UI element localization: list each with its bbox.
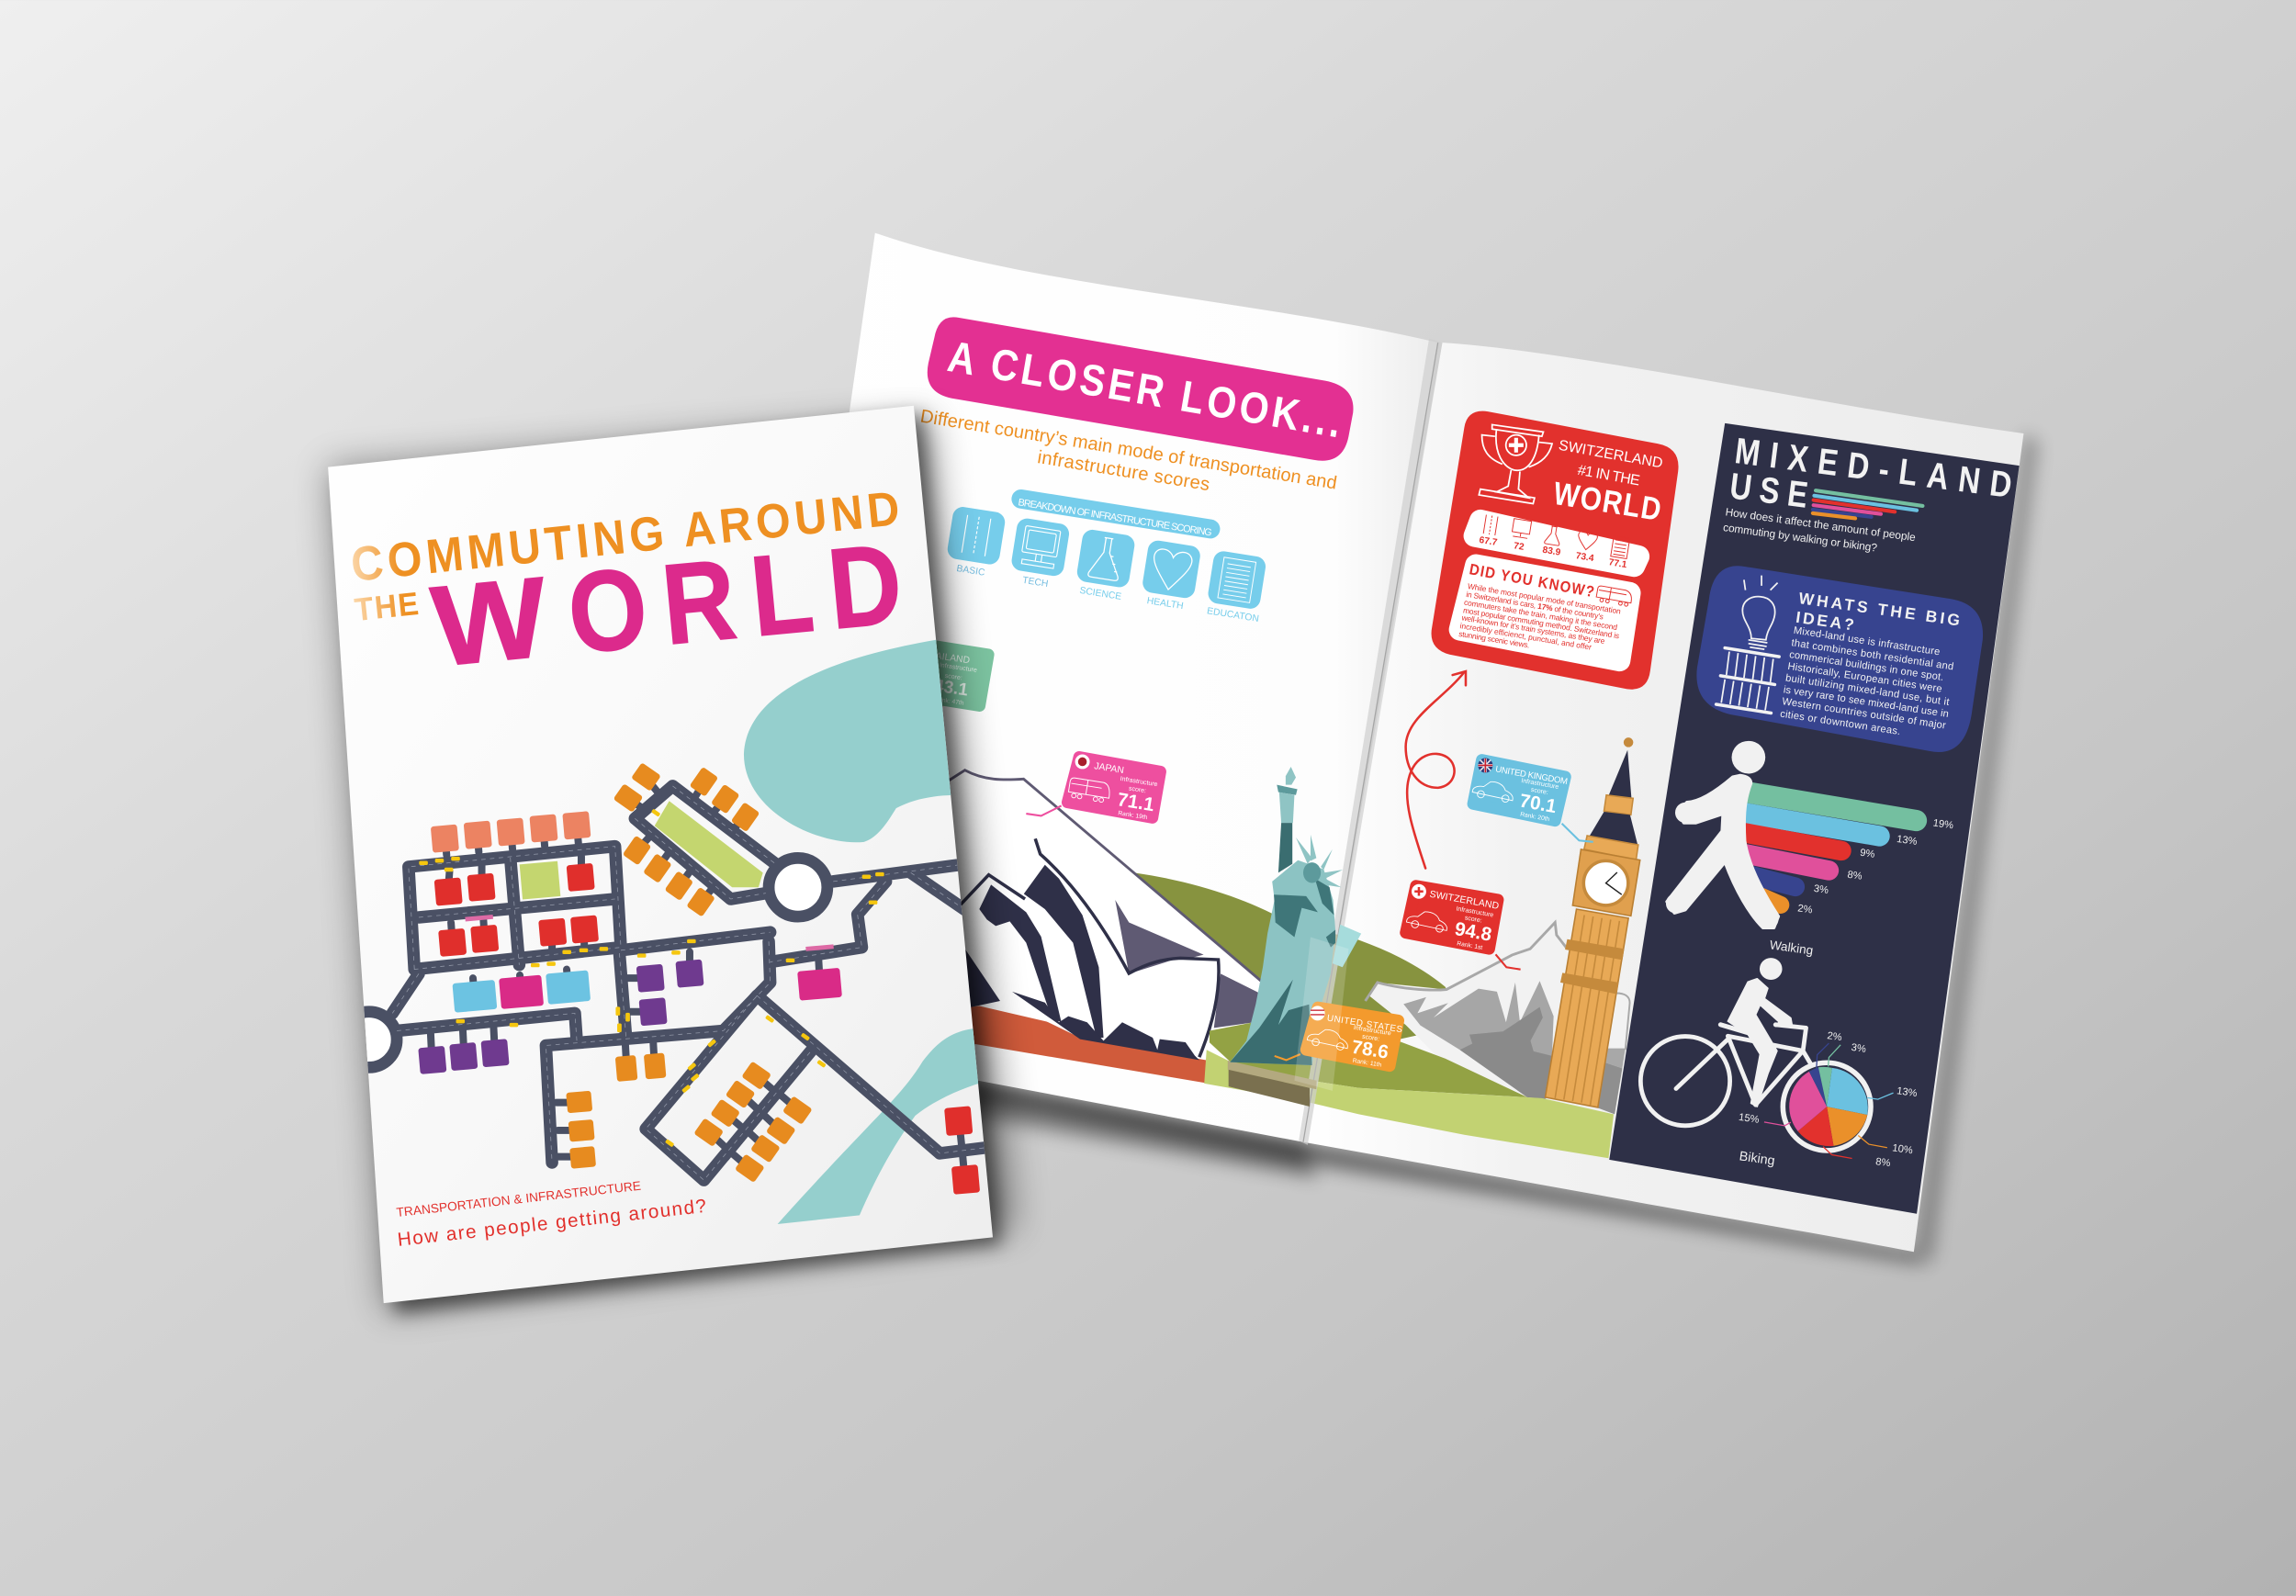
card heading: WORLD — [1551, 476, 1663, 527]
did you know panel: DID YOU KNOW? — [1468, 562, 1595, 601]
chart: biking wheel pie and rider: 15% — [1738, 1112, 1760, 1126]
label: science: SCIENCE — [1079, 586, 1122, 602]
panel: what's the big idea: built utilizing mixed-land use, but it — [1784, 673, 1951, 708]
panel: what's the big idea: commerical buildings in one spot. — [1788, 649, 1944, 683]
panel: left page of magazine — [761, 233, 1438, 1142]
map: road cars — [419, 809, 884, 1147]
tag: Thailand — [915, 645, 988, 707]
card heading: #1 IN THE — [1576, 463, 1641, 489]
landmark: statue of liberty — [1228, 767, 1361, 1107]
tag: United States — [1275, 1006, 1403, 1069]
chart: walking bars and figure — [1666, 741, 1954, 929]
cover title: W — [427, 554, 553, 691]
gutter gloss over illustration — [1294, 937, 1348, 1091]
icon: health — [1142, 539, 1201, 600]
ground: red earth — [970, 1003, 1209, 1083]
subtitle: commuting by walking or biking? — [1722, 521, 1878, 555]
chart: biking wheel pie and rider: 8% — [1875, 1156, 1891, 1169]
hill: upper olive — [1104, 870, 1464, 1057]
tag: Switzerland: SWITZERLAND — [1429, 889, 1500, 912]
heading banner: A CLOSER LOOK: A CLOSER LOOK... — [944, 332, 1345, 447]
panel: what's the big idea: WHATS THE BIG — [1797, 589, 1961, 630]
shadow of open magazine — [966, 433, 2038, 1265]
card heading: SWITZERLAND — [1558, 438, 1664, 471]
tag: United Kingdom: score: — [1530, 787, 1548, 796]
map: park — [655, 801, 763, 887]
did you know panel: most popular commuting method. Switzerland is — [1462, 605, 1620, 640]
mini bars in heading — [1813, 490, 1922, 518]
icon: tech — [1010, 517, 1071, 578]
illustration: landscape with landmarks — [937, 338, 1640, 1158]
label: biking: Biking — [1739, 1149, 1776, 1169]
icon: basic — [946, 505, 1007, 566]
landmark: Big Ben — [1546, 737, 1640, 1107]
tag: Japan: Infrastructure — [1120, 776, 1158, 788]
map: road network — [341, 778, 988, 1180]
hill: lower olive — [1210, 1022, 1527, 1097]
score strip: 73.4 — [1575, 551, 1595, 564]
score strip — [1475, 515, 1638, 570]
icon: cyclist — [1640, 958, 1813, 1126]
tag: Switzerland: 94.8 — [1453, 918, 1493, 946]
subtitle: Different country’s main mode of transportation and — [918, 406, 1338, 494]
icon: trophy — [1479, 424, 1552, 504]
icon: train — [1595, 585, 1633, 607]
tag: Japan: Rank: 19th — [1118, 810, 1148, 821]
label: health: HEALTH — [1146, 596, 1184, 612]
map: coloured buildings — [418, 762, 842, 1183]
panel: magazine cover — [328, 406, 993, 1303]
chart: walking bars and figure: 9% — [1859, 848, 1875, 860]
did you know panel: incredibly efficienct, punctual, and offer — [1459, 621, 1593, 652]
score strip: 67.7 — [1479, 535, 1498, 548]
did you know panel: in Switzerland is cars, 17% of the country’s — [1466, 590, 1604, 621]
panel: Switzerland number one card — [1432, 411, 1679, 690]
map: block with park and red houses — [431, 811, 980, 1195]
icon: car — [1471, 779, 1515, 804]
chart: biking wheel pie and rider: 3% — [1851, 1042, 1867, 1055]
chart: walking bars and figure: 13% — [1896, 834, 1918, 848]
panel: what's the big idea: cities or downtown areas. — [1779, 709, 1901, 737]
icon: walking person — [1666, 741, 1779, 929]
map: road centre dashes — [392, 786, 988, 1180]
arrow: red squiggle to card — [1406, 671, 1466, 869]
tag: Switzerland: Rank: 1st — [1457, 940, 1483, 951]
tag: United States: Infrastructure — [1353, 1025, 1391, 1037]
panel: mixed-land use dark column — [1609, 423, 2020, 1214]
tag: Japan: score: — [1128, 785, 1146, 794]
heading: mixed-land use: MIXED-LAND — [1733, 430, 2014, 506]
tag: Thailand: THAILAND — [922, 649, 971, 666]
tag: United Kingdom: Rank: 20th — [1520, 812, 1550, 823]
icon: train — [1068, 778, 1111, 804]
panel: what's the big idea: Western countries outside of major — [1782, 696, 1947, 732]
tag: United States: score: — [1362, 1034, 1380, 1043]
mountain: Fuji — [950, 769, 1260, 1028]
chart: walking bars and figure: 2% — [1797, 903, 1813, 916]
card heading — [1551, 438, 1664, 527]
landmark: Sydney opera house — [951, 838, 1219, 1060]
shadow of cover — [328, 414, 1017, 1313]
did you know panel: commuters take the train, making it the second — [1463, 598, 1618, 632]
subtitle: How does it affect the amount of people — [1725, 505, 1917, 544]
label: tech: TECH — [1021, 576, 1049, 590]
cover footer text: TRANSPORTATION & INFRASTRUCTURE — [396, 1179, 642, 1219]
did you know panel — [1458, 562, 1633, 660]
pie chart slices — [1789, 1067, 1868, 1146]
icon: car — [1406, 908, 1449, 933]
ground: light green — [1204, 1050, 1614, 1158]
panel: what's the big idea: that combines both residential and — [1791, 637, 1954, 673]
tag: Japan — [1026, 754, 1161, 821]
tag: United States: 78.6 — [1350, 1037, 1390, 1063]
tag: Japan: 71.1 — [1116, 789, 1155, 815]
score strip: 77.1 — [1608, 557, 1627, 570]
tag: United Kingdom: UNITED KINGDOM — [1494, 764, 1569, 787]
tag: Thailand: Rank: 47th — [934, 696, 964, 707]
panel: right page of magazine — [1303, 343, 2023, 1252]
cover title: COMMUTING AROUND — [348, 480, 902, 591]
tag: Thailand: Infrastructure — [939, 662, 977, 674]
label: education: EDUCATON — [1206, 606, 1260, 624]
cover footer text: How are people getting around? — [397, 1196, 707, 1251]
chart: biking wheel pie and rider: 2% — [1827, 1030, 1842, 1043]
label: basic: BASIC — [956, 564, 986, 579]
chart: biking wheel pie and rider: 13% — [1896, 1085, 1918, 1099]
tag: United Kingdom: Infrastructure — [1521, 778, 1559, 791]
cover title: THE — [353, 586, 421, 628]
tag: Japan: JAPAN — [1094, 761, 1124, 776]
panel: what's the big idea: Mixed-land use is infrastructure — [1793, 625, 1941, 658]
chart: walking bars and figure: 3% — [1813, 883, 1829, 896]
icon: building — [1716, 648, 1779, 714]
chart: biking wheel pie and rider — [1640, 958, 1918, 1169]
tag: United States: UNITED STATES — [1326, 1013, 1403, 1035]
panel: what's the big idea: Historically, European cities were — [1787, 661, 1942, 695]
label: walking: Walking — [1769, 938, 1814, 958]
score strip: 83.9 — [1542, 545, 1561, 558]
tag: Thailand: score: — [944, 673, 962, 681]
panel: what's the big idea: is very rare to see mixed-land use in — [1783, 684, 1950, 720]
tag: United Kingdom — [1471, 758, 1593, 842]
chart: walking bars and figure: 8% — [1847, 870, 1863, 882]
pill: breakdown of infrastructure scoring: BREAKDOWN OF INFRASTRUCTURE SCORING — [1018, 497, 1213, 539]
cover title — [348, 480, 907, 691]
tag: United States: Rank: 11th — [1352, 1058, 1382, 1069]
tag: Switzerland: Infrastructure — [1456, 905, 1494, 919]
panel: what's the big idea — [1696, 566, 1983, 752]
panel: what's the big idea: IDEA? — [1795, 608, 1855, 635]
chart: biking wheel pie and rider: 10% — [1892, 1142, 1913, 1156]
icon: car — [1307, 1027, 1350, 1051]
icon: science — [1075, 528, 1136, 589]
subtitle: infrastructure scores — [1036, 447, 1211, 495]
did you know panel: well-known for it’s train systems, as they are — [1460, 613, 1606, 646]
tag: Switzerland: score: — [1464, 915, 1482, 925]
cover title: ORLD — [563, 519, 907, 678]
tag: Thailand: 43.1 — [933, 677, 970, 701]
did you know panel: While the most popular mode of transportation — [1467, 581, 1622, 616]
tag: Switzerland — [1406, 884, 1521, 970]
chart: walking bars and figure: 19% — [1932, 817, 1954, 831]
map: lake and river — [744, 638, 988, 1224]
tag: United Kingdom: 70.1 — [1518, 791, 1558, 817]
did you know panel: stunning scenic views. — [1458, 629, 1530, 650]
icon: light bulb — [1742, 576, 1778, 649]
heading: mixed-land use: USE — [1728, 465, 1810, 515]
icon: education — [1207, 550, 1267, 610]
mountain: Alps — [1366, 923, 1630, 1114]
gutter fold of magazine — [1299, 338, 1442, 1145]
score strip: 72 — [1513, 541, 1525, 553]
